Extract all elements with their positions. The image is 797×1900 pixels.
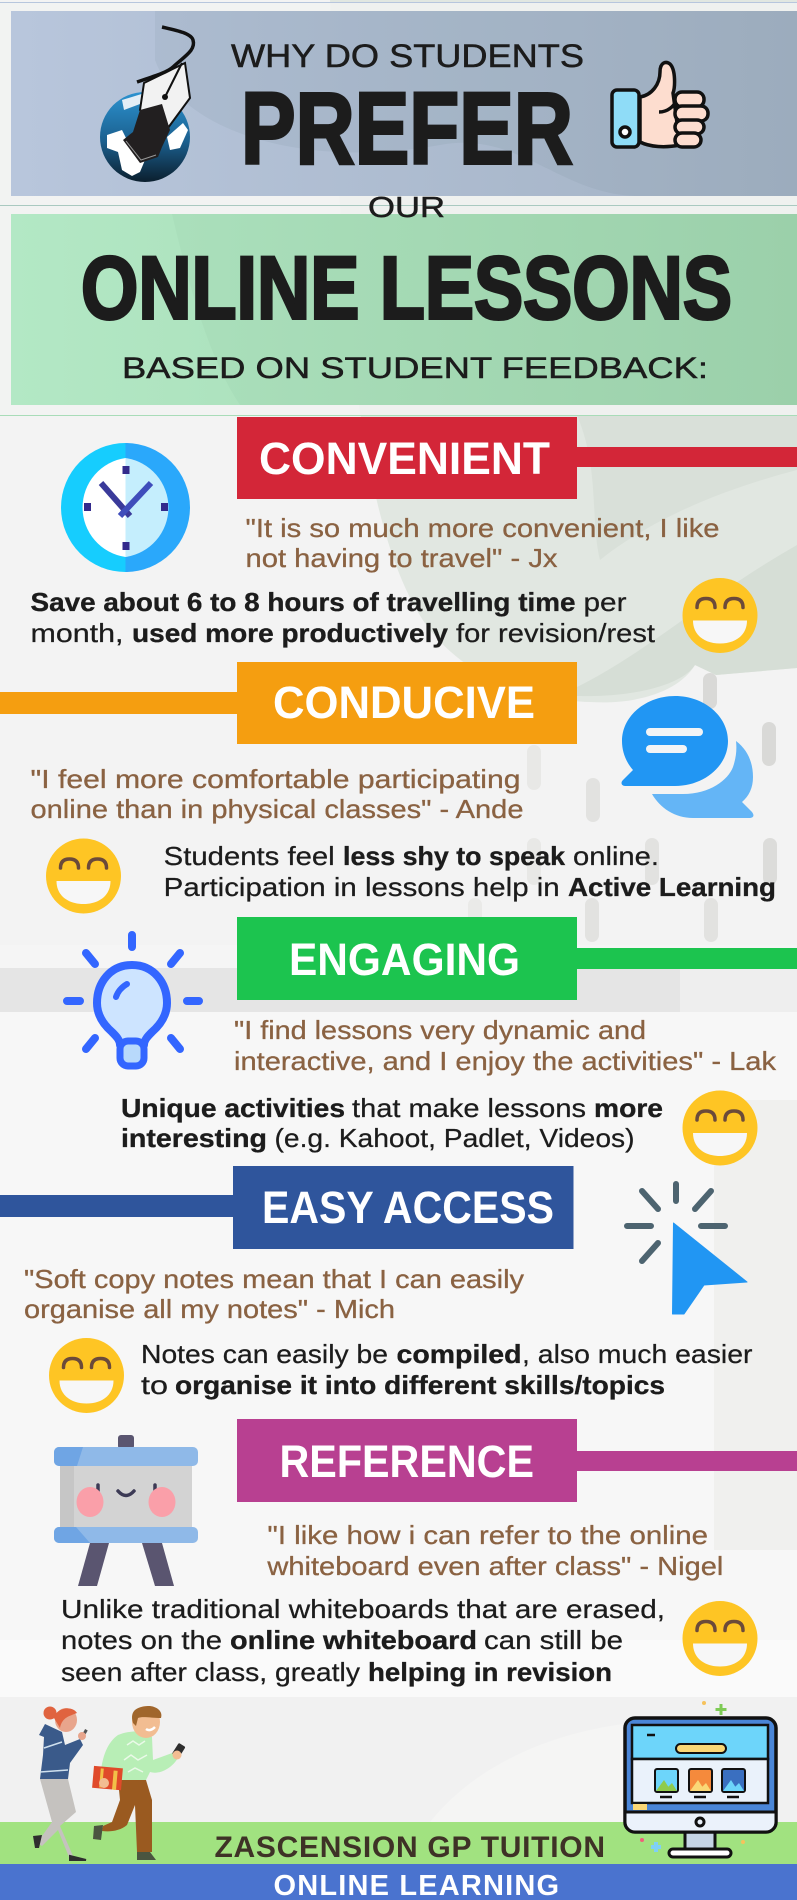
icon: smiley bbox=[682, 1090, 758, 1166]
quote: engaging: interactive, and I enjoy the activities" - Lak bbox=[234, 1046, 777, 1076]
quote: reference: whiteboard even after class" - Nigel bbox=[266, 1551, 723, 1581]
text: convenient benefit: month, bbox=[30, 618, 124, 648]
man bbox=[92, 1706, 186, 1860]
heading: prefer: PREFER bbox=[241, 72, 573, 186]
text: engaging benefit: interesting bbox=[121, 1123, 267, 1153]
text: convenient benefit: used more productively bbox=[132, 618, 449, 648]
text: zascension gp tuition: ZASCENSION GP TUITION bbox=[214, 1831, 605, 1864]
icon: smiley bbox=[682, 1601, 758, 1676]
icon: smiley bbox=[682, 578, 758, 653]
text: easy access benefit: Notes can easily be bbox=[141, 1339, 388, 1369]
text: engaging benefit: (e.g. Kahoot, Padlet, Videos) bbox=[274, 1123, 634, 1153]
text: reference benefit: notes on the bbox=[61, 1625, 222, 1655]
text: easy access benefit: organise it into different skills/topics bbox=[175, 1370, 665, 1400]
quote: convenient bbox=[246, 513, 720, 573]
text: engaging benefit: that make lessons bbox=[352, 1093, 586, 1123]
heading bar: engaging bbox=[237, 917, 797, 1000]
text: easy access benefit bbox=[141, 1339, 753, 1400]
section: easy access bbox=[0, 1166, 753, 1413]
quote: engaging bbox=[234, 1015, 777, 1076]
heading bar: engaging: ENGAGING bbox=[289, 934, 520, 985]
section: engaging bbox=[67, 917, 797, 1166]
text: easy access benefit: , also much easier bbox=[522, 1339, 753, 1369]
quote: conducive: online than in physical classes" - Ande bbox=[30, 794, 524, 824]
heading: why do students: WHY DO STUDENTS bbox=[231, 38, 584, 74]
icon: light bulb bbox=[67, 935, 199, 1066]
heading bar: easy access bbox=[0, 1166, 574, 1249]
panel: online lessons banner bbox=[0, 192, 797, 416]
quote: easy access bbox=[24, 1264, 524, 1324]
quote: reference bbox=[266, 1520, 723, 1581]
subheading: based on student feedback: BASED ON STUDENT FEEDBACK: bbox=[122, 352, 708, 385]
text: easy access benefit: to bbox=[141, 1370, 168, 1400]
quote: conducive: "I feel more comfortable participating bbox=[30, 764, 520, 794]
text: engaging benefit: more bbox=[594, 1093, 663, 1123]
text: conducive benefit: Participation in lessons help in bbox=[164, 872, 560, 902]
quote: easy access: "Soft copy notes mean that I can easily bbox=[24, 1264, 524, 1294]
icon: desktop monitor bbox=[625, 1701, 776, 1857]
heading bar: conducive bbox=[0, 662, 577, 744]
quote: engaging: "I find lessons very dynamic and bbox=[234, 1015, 646, 1045]
text: conducive benefit: online. bbox=[573, 841, 659, 871]
text: convenient benefit: Save about 6 to 8 hours of travelling time bbox=[30, 587, 576, 617]
icon: clock bbox=[61, 443, 190, 572]
text: reference benefit: Unlike traditional whiteboards that are erased, bbox=[61, 1594, 665, 1624]
heading bar: conducive: CONDUCIVE bbox=[273, 677, 535, 728]
text: engaging benefit: Unique activities bbox=[121, 1093, 345, 1123]
footer: brand bands bbox=[0, 1822, 797, 1900]
icon: smiley bbox=[49, 1338, 124, 1413]
quote: convenient: "It is so much more convenient, I like bbox=[246, 513, 720, 543]
section: conducive bbox=[0, 662, 776, 914]
quote: conducive bbox=[30, 764, 524, 824]
text: reference benefit bbox=[61, 1594, 665, 1687]
icon: globe with pen nib logo bbox=[100, 27, 193, 182]
header panel: why do students prefer bbox=[0, 2, 797, 206]
text: reference benefit: can still be bbox=[484, 1625, 623, 1655]
icon: chat bubbles bbox=[622, 696, 753, 818]
text: engaging benefit bbox=[121, 1093, 663, 1153]
heading bar: convenient bbox=[237, 417, 797, 499]
text: convenient benefit: per bbox=[584, 587, 627, 617]
quote: convenient: not having to travel" - Jx bbox=[246, 543, 558, 573]
section: reference bbox=[54, 1419, 797, 1687]
text: reference benefit: seen after class, greatly bbox=[61, 1657, 360, 1687]
quote: reference: "I like how i can refer to the online bbox=[267, 1520, 708, 1550]
icon: whiteboard bbox=[54, 1435, 198, 1586]
text: convenient benefit: for revision/rest bbox=[456, 618, 656, 648]
text: conducive benefit bbox=[164, 841, 776, 902]
text: conducive benefit: Active Learning bbox=[568, 872, 776, 902]
text: easy access benefit: compiled bbox=[396, 1339, 522, 1369]
text: reference benefit: helping in revision bbox=[368, 1657, 612, 1687]
text: conducive benefit: Students feel bbox=[164, 841, 335, 871]
section: convenient bbox=[30, 417, 797, 653]
heading: our: OUR bbox=[368, 192, 445, 224]
woman bbox=[33, 1706, 88, 1860]
icon: mouse cursor bbox=[627, 1184, 747, 1314]
text: conducive benefit: less shy to speak bbox=[343, 841, 566, 871]
text: convenient benefit bbox=[30, 587, 656, 648]
heading bar: reference bbox=[237, 1419, 797, 1502]
quote: easy access: organise all my notes" - Mich bbox=[24, 1294, 395, 1324]
text: reference benefit: online whiteboard bbox=[230, 1625, 477, 1655]
icon: smiley bbox=[46, 838, 121, 914]
illustration: students walking with phones bbox=[33, 1706, 186, 1860]
heading bar: easy access: EASY ACCESS bbox=[262, 1182, 554, 1233]
heading bar: convenient: CONVENIENT bbox=[259, 433, 550, 484]
heading bar: reference: REFERENCE bbox=[280, 1436, 534, 1487]
icon: thumbs up bbox=[612, 63, 708, 147]
